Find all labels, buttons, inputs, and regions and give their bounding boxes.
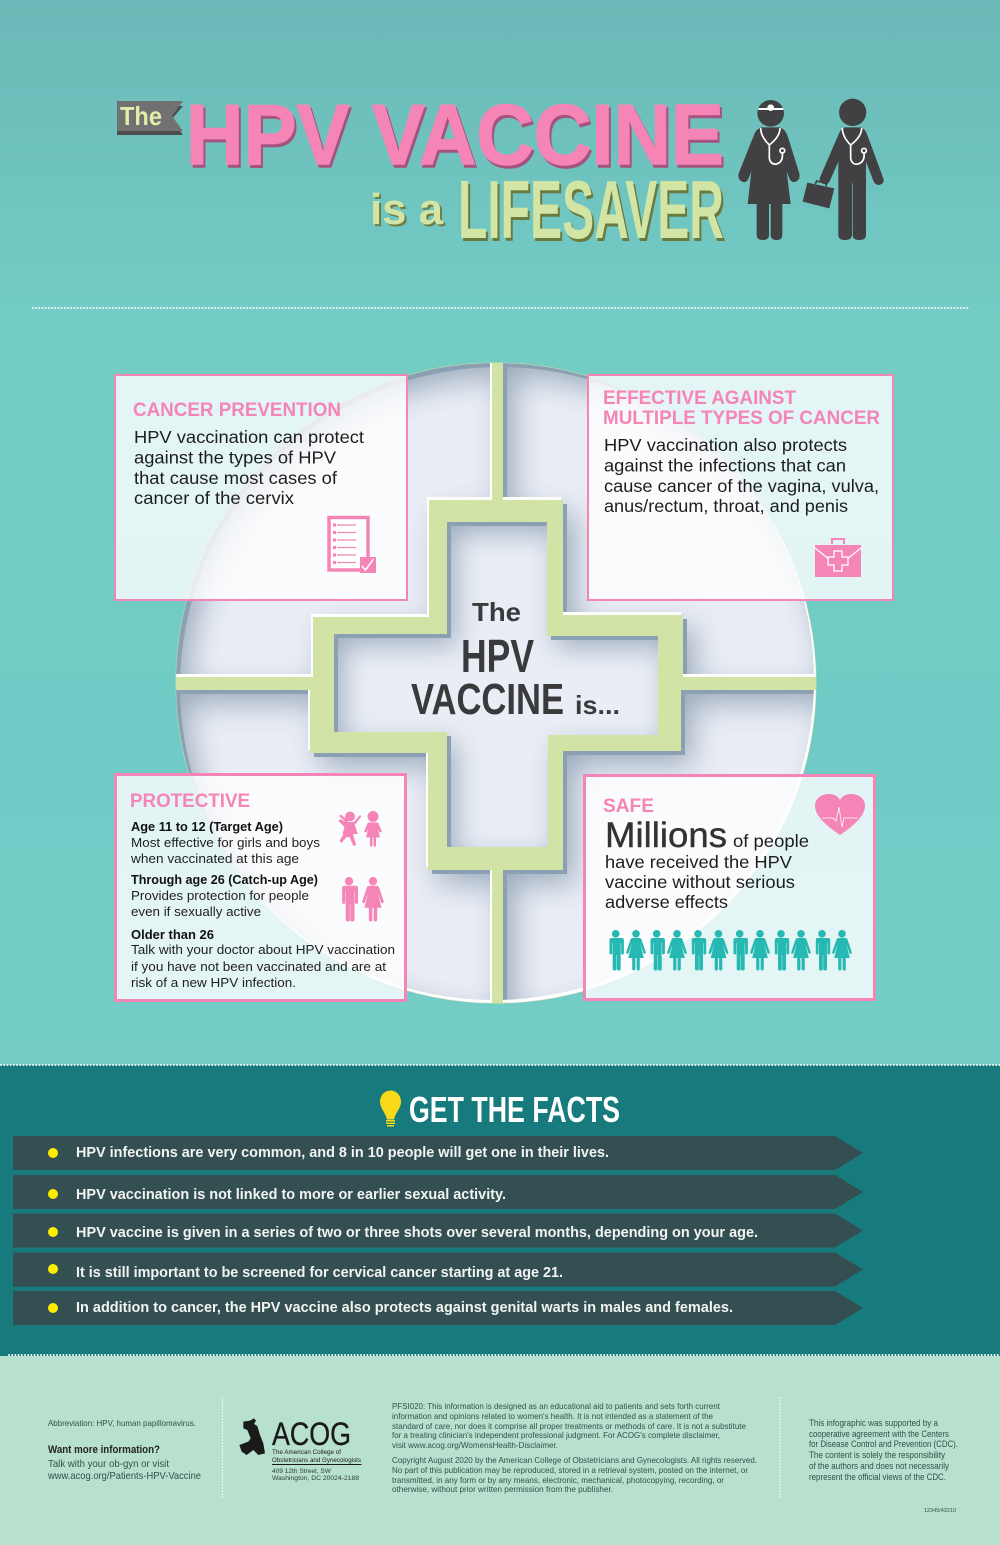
center heading: HPV [461,630,534,682]
fact 1: HPV infections are very common, and 8 in 10 people will get one in their lives. [76,1144,609,1161]
center heading: is... [575,690,620,720]
panel body text: cause cancer of the vagina, vulva, [604,476,879,496]
footer: disclaimer: visit www.acog.org/WomensHealth-Disclaimer. [392,1440,558,1450]
footer: disclaimer: transmitted, in any form or by any means, electronic, mechanical, photocopying, recording, or [392,1475,724,1485]
quadrant: bottom left [170,690,492,1010]
center heading: The [472,597,521,627]
quadrant: top left [170,360,492,677]
quadrant: bottom right [503,690,830,1010]
title line: HPV VACCINE: HPV VACCINE [186,88,724,183]
footer: disclaimer: for a treating clinician's independent professional judgment. For ACOG's complete disclaimer, [392,1430,720,1440]
ribbon: The [117,101,183,135]
age group: through 26: Through age 26 (Catch-up Age) [131,872,318,887]
divider: title [33,307,968,309]
title line: is a: is a [372,187,446,236]
title line: LIFESAVER [458,163,726,259]
icon: heart with pulse [815,794,865,835]
panel heading: CANCER PREVENTION [133,400,341,421]
panel body text: HPV vaccination also protects [604,435,847,455]
footer: funding statement: of the authors and does not necessarily [809,1461,950,1471]
logo: ACOG: 409 12th Street, SW [272,1468,332,1475]
logo: ACOG: ACOG [272,1416,351,1452]
statistic: millions: Millions [605,816,727,855]
center heading: VACCINE [411,675,564,724]
center heading [411,597,620,724]
footer: more information: Abbreviation: HPV, human papillomavirus. [48,1418,196,1428]
footer: funding statement: for Disease Control and Prevention (CDC). [809,1439,958,1449]
age group: older than 26: Talk with your doctor about HPV vaccination [131,942,395,957]
panel: safe [584,776,874,1000]
icon: light bulb [380,1090,401,1126]
footer: funding statement: represent the official views of the CDC. [809,1472,946,1482]
panel heading: PROTECTIVE [130,791,250,812]
panel body text [604,435,879,516]
footer: funding statement: The content is solely the responsibility [809,1450,946,1460]
fact 2: HPV vaccination is not linked to more or earlier sexual activity. [76,1186,506,1203]
footer: disclaimer: standard of care, nor does it comprise all proper treatments or methods of care. It is not a substitute [392,1421,746,1431]
footer: disclaimer: information and opinions related to women's health. It is not intended as a statement of the [392,1411,713,1421]
panel heading: MULTIPLE TYPES OF CANCER [603,408,880,429]
title line: HPV VACCINE: HPV VACCINE [188,91,726,186]
ribbon: The: The [120,101,162,131]
fact 5: In addition to cancer, the HPV vaccine also protects against genital warts in males and females. [76,1299,733,1316]
age group: 11 to 12: Age 11 to 12 (Target Age) [131,819,283,834]
fact 1 [13,1136,863,1170]
panel body text: anus/rectum, throat, and penis [604,496,848,516]
title line: LIFESAVER: LIFESAVER [460,166,726,259]
footer: disclaimer: No part of this publication may be reproduced, stored in a retrieval system, posted on the internet, or [392,1465,748,1475]
heading: get the facts: GET THE FACTS [409,1089,620,1130]
title line: is a: is a [370,185,444,234]
fact 3: HPV vaccine is given in a series of two or three shots over several months, depending on your age. [76,1224,758,1241]
logo: ACOG: Obstetricians and Gynecologists [272,1457,362,1464]
panel heading: SAFE [603,796,654,817]
panel heading: EFFECTIVE AGAINST [603,388,796,409]
panel body text: of people [733,831,809,851]
logo: ACOG [239,1416,362,1482]
panel body text: against the types of HPV [134,448,336,468]
icon: medical kit [815,539,861,577]
age group: older than 26: Older than 26 [131,927,214,942]
panel body text: have received the HPV [605,852,792,872]
footer: more information: Want more information? [48,1444,160,1456]
icon: adults [342,877,384,922]
panel body text: cancer of the cervix [134,488,294,508]
logo: ACOG: The American College of [272,1449,341,1456]
fact 5 [13,1291,863,1325]
footer: document code: 12345/43210 [924,1508,956,1514]
icon: row of people [610,930,852,970]
title line: LIFESAVER: LIFESAVER [458,163,724,256]
icon: children [338,811,382,846]
panel body text [134,427,364,508]
footer: funding statement [809,1418,958,1482]
section: get the facts [0,1065,1000,1356]
icon: female doctor [738,100,800,240]
panel body text: HPV vaccination can protect [134,427,364,447]
age group: 11 to 12: Most effective for girls and boys [131,835,320,850]
panel: effective against multiple cancers [588,375,893,600]
panel body text [605,831,809,912]
panel: protective [116,774,406,1000]
age group: 11 to 12: when vaccinated at this age [130,851,299,866]
icon: male doctor with briefcase [803,99,884,240]
footer: more information: www.acog.org/Patients-HPV-Vaccine [47,1470,201,1482]
footer [0,1356,1000,1545]
age group: older than 26: risk of a new HPV infection. [131,975,296,990]
age group: through 26 [131,872,318,919]
center cross [334,522,658,847]
panel body text: against the infections that can [604,456,846,476]
central disk with recessed cross [170,360,830,1010]
fact 2 [13,1175,863,1209]
fact 3 [13,1214,863,1248]
footer: disclaimer: PFSI020: This information is designed as an educational aid to patients and sets forth current [392,1401,721,1411]
icon: checklist [329,518,376,573]
panel body text: that cause most cases of [134,468,337,488]
footer: more information [47,1418,201,1482]
footer: disclaimer [392,1401,757,1494]
footer: disclaimer: Copyright August 2020 by the American College of Obstetricians and Gynecologists. All rights reserved. [392,1455,757,1465]
footer: funding statement: cooperative agreement with the Centers [809,1429,950,1439]
quadrant: top right [503,360,830,677]
age group: older than 26: if you have not been vaccinated and are at [131,959,386,974]
panel: cancer prevention [115,375,407,600]
icon: ACOG figure [239,1418,265,1455]
disk base [176,362,816,1004]
title [117,88,726,259]
logo: ACOG: Washington, DC 20024-2188 [272,1475,359,1482]
panel body text: adverse effects [605,892,728,912]
age group: older than 26 [131,927,395,990]
age group: 11 to 12 [130,819,320,866]
panel body text: vaccine without serious [605,872,795,892]
footer: funding statement: This infographic was supported by a [809,1418,938,1428]
panel heading [603,388,880,429]
footer: disclaimer: otherwise, without prior written permission from the publisher. [392,1484,613,1494]
fact 4 [13,1252,863,1286]
footer: more information: Talk with your ob-gyn or visit [48,1458,169,1470]
age group: through 26: even if sexually active [131,904,261,919]
fact 4: It is still important to be screened for cervical cancer starting at age 21. [76,1264,563,1281]
age group: through 26: Provides protection for people [131,888,309,903]
